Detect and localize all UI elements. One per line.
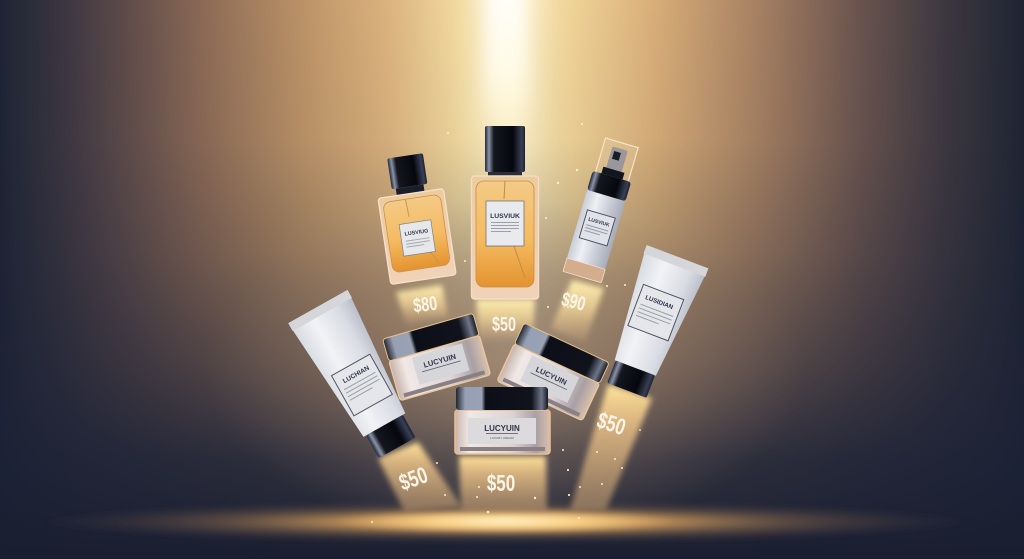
product: left jar: [383, 313, 491, 401]
product: centre jar: [455, 387, 550, 454]
spray label: LUSVIUK: [587, 217, 611, 229]
tube cap: [607, 360, 655, 398]
perfume glass body: [472, 176, 538, 299]
perfume label: [486, 201, 524, 246]
spray base: [563, 258, 605, 283]
jar lid: [456, 387, 548, 410]
product: left tube: [288, 290, 427, 464]
perfume label: LUSVIUG: [404, 228, 429, 238]
spray clear cap: [593, 138, 638, 190]
floor light glow: [35, 501, 975, 543]
tube label: [628, 284, 684, 341]
jar body: [497, 344, 600, 421]
sparkles: [371, 123, 641, 523]
jar label: LUCYUIN: [534, 365, 568, 387]
jar lid: [383, 313, 479, 361]
jar label: LUXURY CREAM: [490, 436, 514, 440]
spray label: [579, 210, 615, 246]
jar body: [389, 335, 491, 401]
jar body: [455, 410, 550, 454]
spray pump: [587, 143, 639, 201]
spray body: [567, 190, 625, 269]
perfume cap: [387, 153, 428, 196]
tube label: [331, 354, 392, 416]
price: spray: $90: [559, 287, 588, 315]
lower light beams: [378, 384, 652, 511]
product: right tube: [596, 245, 708, 402]
product: centre perfume bottle: [472, 126, 538, 299]
product: right jar: [497, 323, 609, 421]
tube cap: [366, 415, 415, 458]
price: centre perfume: $50: [492, 313, 516, 336]
jar label: LUCYUIN: [484, 424, 520, 433]
tube label: LUCHIAN: [342, 365, 371, 385]
tube body: [288, 290, 414, 442]
perfume glass body: [378, 189, 456, 284]
perfume cap: [485, 126, 525, 176]
top light beam: [486, 0, 526, 190]
light beams under products: [396, 280, 604, 342]
price: left perfume: $80: [412, 291, 438, 317]
price: centre jar: $50: [487, 472, 515, 497]
tube label: LUSIDIAN: [644, 294, 674, 311]
product: spray bottle: [563, 137, 641, 283]
price: right tube: $50: [594, 408, 628, 441]
perfume label: LUSVIUK: [490, 213, 520, 220]
jar label: [468, 418, 536, 444]
price: left tube: $50: [396, 463, 431, 496]
tube body: [604, 245, 708, 380]
jar label: LUCYUIN: [422, 352, 457, 370]
product: left perfume bottle: [372, 151, 456, 284]
jar lid: [514, 323, 609, 384]
